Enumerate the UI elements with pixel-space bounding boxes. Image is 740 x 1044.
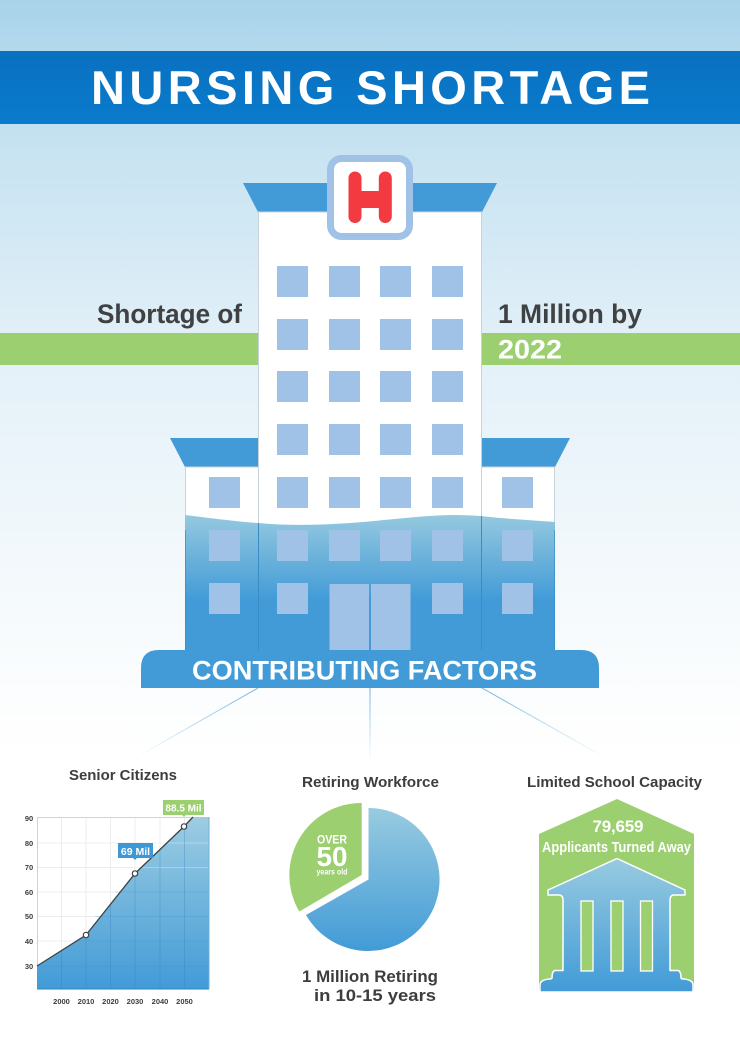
callout: 69 mil: 69 Mil: [121, 846, 150, 858]
slice label: years old: [316, 868, 348, 876]
y axis labels: 60: [25, 888, 33, 897]
caption: 1 million retiring: in 10-15 years: [314, 986, 436, 1005]
y axis labels: 80: [25, 839, 33, 848]
title: NURSING SHORTAGE: [91, 61, 650, 114]
contributing factors plinth: [141, 650, 599, 688]
stat: 79,659: 79,659: [592, 817, 644, 836]
x axis labels: 2020: [102, 997, 119, 1006]
right wing roof: [482, 438, 570, 467]
text: applicants turned away: Applicants Turned Away: [542, 839, 692, 856]
y axis labels: 30: [25, 962, 33, 971]
data points: [83, 824, 187, 938]
icon: columned building: [540, 858, 693, 992]
y axis labels: 90: [25, 814, 33, 823]
doors: [330, 584, 410, 650]
heading: retiring workforce: Retiring Workforce: [302, 775, 439, 791]
x axis labels: 2040: [152, 997, 168, 1006]
x axis labels: 2030: [127, 997, 143, 1006]
connector lines: [135, 688, 606, 762]
green band: [0, 333, 740, 365]
trend line: [37, 817, 193, 966]
left wing roof: [170, 438, 258, 467]
heading: contributing factors: CONTRIBUTING FACTORS: [192, 656, 537, 686]
y axis labels: 50: [25, 912, 33, 921]
area under curve: [37, 817, 209, 989]
flood water: [185, 515, 555, 651]
callout: 88.5 mil: [163, 800, 204, 817]
callout: 88.5 mil: 88.5 Mil: [165, 804, 202, 814]
x axis labels: 2010: [78, 997, 94, 1006]
title banner: [0, 51, 740, 124]
green house shape: [539, 799, 694, 990]
column gaps: [581, 901, 652, 971]
left wing: [186, 467, 258, 651]
y axis labels: 40: [25, 937, 33, 946]
right wing: [482, 467, 554, 651]
heading: limited school capacity: Limited School Capacity: [527, 775, 702, 791]
callout: 69 mil: [118, 843, 153, 860]
hospital sign: [330, 158, 410, 236]
main tower: [258, 212, 482, 651]
windows: [209, 266, 533, 614]
caption: 1 million retiring: 1 Million Retiring: [302, 967, 438, 986]
y axis labels: 70: [25, 863, 33, 872]
x axis labels: 2000: [53, 997, 70, 1006]
green slice: [289, 803, 362, 912]
text: shortage of: Shortage of: [97, 299, 243, 329]
text: 1 million by: 1 Million by: [498, 299, 642, 329]
pie chart: retiring workforce: [289, 803, 440, 951]
slice label: OVER: [317, 834, 348, 846]
caption: 1 million retiring: [302, 967, 438, 1005]
slice label: 50: [316, 841, 348, 872]
x axis labels: [53, 997, 193, 1006]
y axis labels: [25, 814, 33, 971]
school graphic: [539, 799, 694, 992]
hospital building: [170, 158, 570, 651]
icon: H: [355, 178, 385, 216]
heading: senior citizens: Senior Citizens: [69, 768, 177, 784]
text: 2022: 2022: [498, 334, 562, 364]
x axis labels: 2050: [176, 997, 193, 1006]
line chart: senior citizens: [25, 800, 209, 1006]
blue slice: [306, 808, 440, 951]
main roof: [243, 183, 497, 212]
